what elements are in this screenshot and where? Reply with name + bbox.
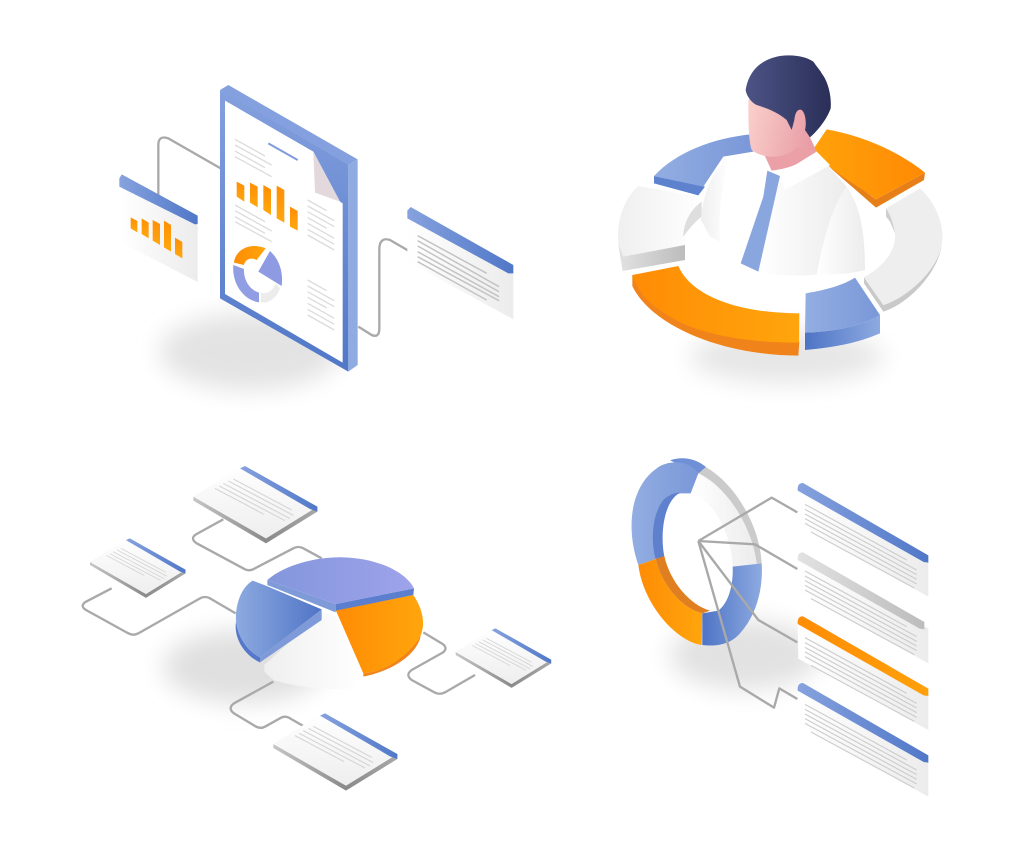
card 3 — [798, 616, 928, 730]
ground shadow — [670, 620, 820, 690]
hair — [746, 55, 831, 137]
connector lines — [698, 498, 797, 708]
donut segment: orange — [638, 556, 710, 645]
ring segment: blue bottom — [805, 278, 880, 350]
panel: report document with charts — [119, 85, 513, 390]
ground shadow — [160, 313, 340, 390]
donut segment: white — [691, 465, 762, 567]
connector lines — [158, 137, 408, 336]
tie — [741, 171, 780, 272]
connector lines — [83, 519, 475, 728]
panel: businessman inside ring chart — [618, 55, 942, 383]
text lines — [235, 139, 334, 330]
card 2 — [798, 552, 928, 663]
pie slice: periwinkle — [267, 557, 414, 612]
bar chart — [237, 182, 298, 231]
person — [701, 55, 865, 277]
small chart card — [119, 174, 198, 282]
donut chart — [632, 458, 762, 646]
ground shadow — [163, 630, 323, 703]
pie slice: orange — [336, 595, 423, 677]
right text card — [407, 207, 513, 319]
neck and face — [748, 83, 817, 171]
document page — [225, 101, 343, 363]
ring segment: orange top right — [812, 129, 925, 208]
ring segment: white left — [618, 186, 702, 271]
document heading line — [268, 143, 298, 160]
document — [220, 85, 358, 372]
donut segment: blue — [702, 563, 762, 646]
card 4 — [798, 683, 928, 797]
donut segment: light blue — [632, 458, 706, 565]
card 1 — [798, 483, 928, 597]
shirt — [701, 152, 865, 277]
card: top — [193, 466, 317, 543]
card: right — [456, 628, 551, 688]
card: bottom — [273, 713, 397, 791]
pie slice: white — [264, 612, 362, 689]
small bar chart — [131, 217, 182, 258]
panel: pie chart with linked cards — [83, 466, 551, 791]
ring segment: blue top — [654, 134, 753, 195]
ground shadow — [690, 330, 883, 383]
donut inner wall: blue — [653, 493, 680, 559]
pie chart — [236, 557, 423, 689]
card: left — [90, 538, 185, 598]
collar — [779, 152, 830, 190]
pie slice: royal blue — [236, 581, 322, 662]
donut chart — [233, 246, 282, 302]
folded corner — [313, 152, 340, 202]
panel: donut chart with upright cards — [632, 458, 928, 797]
ring segment: white right — [864, 188, 942, 312]
ring segment: orange bottom — [632, 266, 799, 356]
